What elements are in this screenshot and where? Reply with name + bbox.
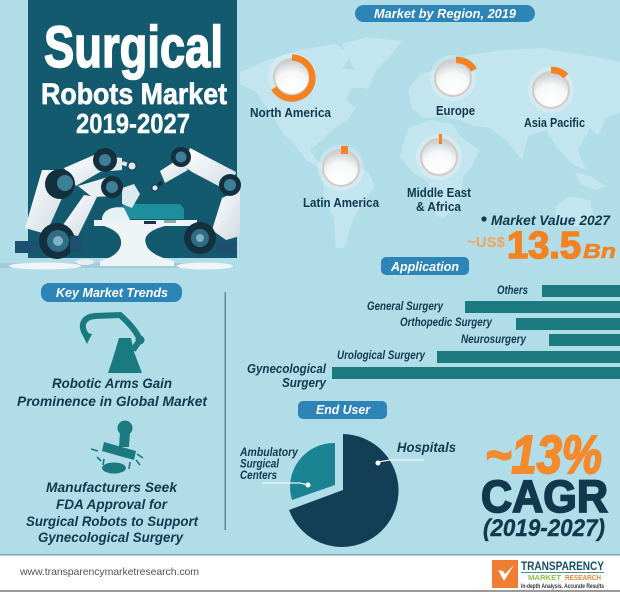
bar: gynecological surgery: Gynecological	[247, 361, 326, 376]
bar: gynecological surgery	[247, 361, 620, 390]
leader: hospitals	[378, 460, 424, 462]
bar: general surgery	[367, 301, 620, 313]
cagr callout: (2019-2027)	[483, 515, 605, 542]
heading pill: key market trends: Key Market Trends	[56, 286, 168, 300]
heading pill: application: Application	[390, 260, 459, 274]
trend text: fda approval: Gynecological Surgery	[38, 529, 184, 545]
trend text: fda approval: Manufacturers Seek	[46, 479, 178, 495]
left arm 1	[25, 170, 62, 234]
donut: middle east and africa	[407, 134, 472, 214]
trend text: fda approval: Surgical Robots to Support	[26, 513, 199, 529]
bar: gynecological surgery: Surgery	[282, 375, 327, 390]
illustration: surgical robots and operating table	[0, 147, 241, 270]
label: asia pacific: Asia Pacific	[524, 115, 585, 130]
heading pill: application	[381, 257, 469, 275]
donut: asia pacific	[524, 67, 585, 130]
label: middle east and africa: & Africa	[416, 199, 462, 214]
label: latin america: Latin America	[303, 195, 380, 210]
pie label: ambulatory surgical centers	[239, 445, 299, 482]
cagr callout: CAGR	[481, 471, 608, 522]
pie label: ambulatory surgical centers: Surgical	[240, 456, 280, 470]
logo: transparency market research: TRANSPARENCY	[521, 559, 604, 573]
bar: others	[497, 285, 620, 297]
market value callout: Market Value 2027	[491, 212, 611, 228]
pie label: ambulatory surgical centers: Ambulatory	[239, 445, 299, 459]
market value callout: ~US$	[467, 234, 506, 251]
left robot base	[9, 262, 81, 270]
patient	[120, 204, 184, 219]
label: middle east and africa	[407, 185, 472, 214]
trend text: robotic arms: Prominence in Global Market	[17, 393, 208, 409]
icon: approval stamp	[91, 420, 143, 474]
heading pill: end user: End User	[316, 403, 371, 417]
slice: ambulatory surgical centers	[290, 443, 335, 500]
slice: hospitals	[289, 434, 399, 547]
title text	[41, 15, 227, 139]
market value callout	[467, 212, 616, 267]
leader dot: ambulatory	[306, 482, 310, 488]
donut: latin america	[303, 145, 380, 210]
label: europe: Europe	[436, 103, 475, 118]
trend text: fda approval	[26, 479, 199, 545]
logo: transparency market research	[492, 559, 605, 590]
bar: urological surgery	[337, 350, 620, 363]
logo: transparency market research: MARKET	[528, 575, 562, 582]
bar chart: application	[247, 285, 620, 390]
trend text: robotic arms: Robotic Arms Gain	[52, 375, 172, 391]
footer	[0, 554, 620, 592]
left arm 2	[58, 195, 97, 236]
bar: neurosurgery	[461, 334, 620, 346]
right arm	[212, 190, 240, 240]
donut: europe	[430, 55, 476, 118]
trend text: fda approval: FDA Approval for	[56, 496, 168, 512]
market value callout: Bn	[583, 241, 616, 263]
label: middle east and africa: Middle East	[407, 185, 472, 200]
right robot base	[177, 262, 233, 270]
heading pill: market by region	[355, 5, 535, 22]
pie chart: end user	[262, 434, 424, 547]
world map background	[240, 37, 620, 248]
trend text: robotic arms	[17, 375, 208, 409]
bar: neurosurgery: Neurosurgery	[461, 334, 527, 346]
heading pill: key market trends	[41, 283, 182, 302]
left robot joints	[45, 169, 75, 199]
bar: orthopedic surgery: Orthopedic Surgery	[400, 317, 493, 329]
heading pill: market by region: Market by Region, 2019	[374, 7, 516, 21]
pie label: hospitals: Hospitals	[397, 440, 456, 455]
label: north america: North America	[250, 105, 332, 120]
title text: 2019-2027	[76, 108, 190, 139]
icon: robotic arm	[81, 315, 144, 373]
table	[94, 220, 197, 266]
pie label: ambulatory surgical centers: Centers	[240, 468, 277, 482]
logo: transparency market research: RESEARCH	[565, 575, 601, 582]
bar: general surgery: General Surgery	[367, 301, 444, 313]
lamp	[122, 184, 140, 208]
leader dot: hospitals	[376, 460, 380, 466]
bar: orthopedic surgery	[400, 317, 620, 330]
title text: Robots Market	[41, 78, 227, 111]
title panel	[28, 0, 237, 258]
bar: urological surgery: Urological Surgery	[337, 350, 426, 362]
logo: transparency market research: In-depth Analysis. Accurate Results	[521, 584, 605, 590]
donut: north america	[250, 53, 332, 120]
website url: www.transparencymarketresearch.com	[19, 566, 199, 578]
right robot joints	[171, 147, 191, 167]
heading pill: end user	[298, 401, 387, 419]
leader: ambulatory	[262, 483, 308, 485]
cagr callout	[481, 425, 608, 542]
bar: others: Others	[497, 285, 528, 297]
title text: Surgical	[44, 15, 223, 80]
market value callout: 13.5	[507, 225, 581, 267]
